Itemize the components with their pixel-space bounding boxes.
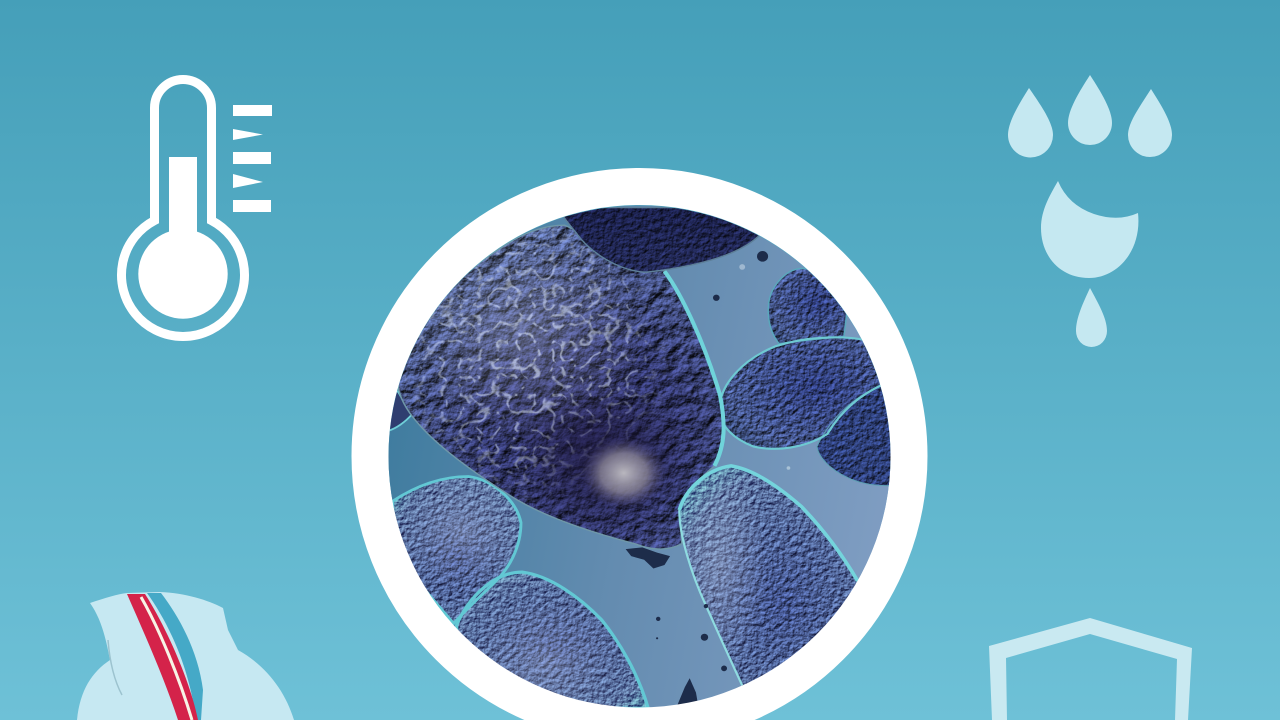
coarse wrinkled texture on large bacterium xyxy=(398,226,722,548)
bottom bacterium xyxy=(457,572,648,708)
lower right bacterium xyxy=(817,384,896,486)
icon: thermometer xyxy=(121,80,272,336)
fine texture on background bacteria xyxy=(394,269,890,707)
white ring around microscope view xyxy=(370,186,909,720)
rims of background bacteria xyxy=(393,268,896,708)
large central bacterium xyxy=(398,225,724,549)
fine texture on foreground bacteria xyxy=(564,208,858,686)
icon: skin cross-section with red stripe xyxy=(77,592,294,720)
white ridges, shadow and pale highlight on large bacterium xyxy=(402,226,684,522)
top dark bacterium xyxy=(557,207,768,272)
upper right bacterium xyxy=(768,268,848,344)
small bacterium at left edge xyxy=(390,390,412,432)
lower left bacterium xyxy=(393,477,521,623)
lower right large bacterium xyxy=(680,468,858,686)
middle right bacterium xyxy=(719,337,883,449)
rims of foreground bacteria xyxy=(557,207,858,685)
pale sheen on lower right bacterium xyxy=(684,478,760,648)
icon: water drops xyxy=(1008,75,1172,347)
debris specks xyxy=(626,251,790,707)
icon: shield xyxy=(989,618,1192,720)
rim of large bacterium xyxy=(398,225,724,549)
microscope view of bacteria xyxy=(388,206,890,708)
sheen on bottom bacteria xyxy=(408,483,610,702)
